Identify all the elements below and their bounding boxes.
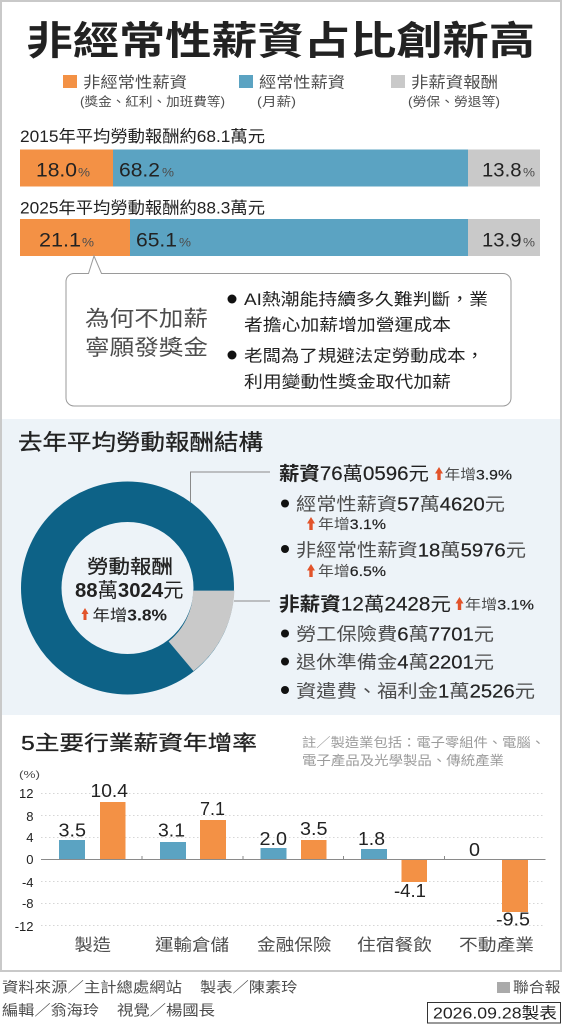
donut chart	[41, 502, 234, 674]
bar value labels: 1.8	[358, 828, 385, 849]
y axis labels: -12	[15, 919, 34, 934]
y axis labels: (%)	[19, 770, 40, 781]
wages total	[279, 463, 512, 485]
non-recurring wages	[281, 540, 526, 579]
footer credits: 視覺／楊國長	[117, 1002, 216, 1020]
chart note: 註／製造業包括：電子零組件、電腦、	[302, 735, 545, 750]
wages total: 薪資76萬0596元	[279, 463, 429, 485]
date stamp	[428, 1002, 560, 1023]
industry labels	[74, 936, 534, 954]
stacked bar 2025: 13.9	[482, 230, 522, 252]
callout question	[85, 307, 208, 360]
bar value labels: 3.5	[300, 818, 328, 839]
stacked bar 2025: %	[523, 236, 535, 250]
stacked bar 2025: %	[179, 236, 191, 250]
non-recurring wages: 非經常性薪資 18萬5976 元	[296, 540, 526, 560]
legend item: non-wage compensation: 非薪資報酬	[411, 74, 498, 92]
chart heading: 5主要行業薪資年增率	[21, 732, 257, 755]
leader line: wages	[190, 472, 270, 502]
date stamp: 2026.09.28製表	[433, 1004, 557, 1022]
labor insurance: 勞工保險費 6萬7701 元	[296, 624, 494, 644]
legend item: recurring pay: (月薪)	[257, 95, 296, 109]
orange bars: bonuses	[100, 802, 528, 912]
stacked bar 2015	[20, 150, 540, 186]
bar value labels: 10.4	[90, 780, 128, 801]
stacked bar 2025: 21.1	[39, 230, 81, 252]
industry labels: 運輸倉儲	[155, 936, 229, 954]
footer credits	[2, 980, 298, 1020]
callout: why bonuses instead of raises	[66, 256, 511, 406]
stacked bar 2015: 18.0	[36, 160, 77, 182]
industry labels: 住宿餐飲	[357, 936, 432, 954]
bar value labels: 2.0	[260, 828, 287, 849]
stacked bar 2015: %	[523, 166, 535, 180]
legend item: non-wage compensation	[391, 74, 500, 109]
bar value labels: 0	[469, 839, 480, 860]
legend item: non-wage compensation: (勞保、勞退等)	[408, 94, 500, 109]
bar chart: wage growth by industry	[15, 770, 546, 954]
bar value labels: -4.1	[394, 880, 426, 901]
legend item: recurring pay: 經常性薪資	[259, 74, 345, 92]
recurring wages: 經常性薪資 57萬4620 元	[296, 494, 505, 514]
callout reason 2	[228, 346, 484, 392]
title: 非經常性薪資占比創新高	[26, 20, 535, 64]
publisher mark: 聯合報	[513, 980, 561, 996]
non-wage total	[279, 594, 534, 616]
bar value labels: 7.1	[200, 798, 225, 819]
non-recurring wages: 年增 6.5%	[318, 563, 386, 579]
y axis labels: 4	[26, 830, 34, 845]
callout reason 1: AI熱潮能持續多久難判斷，業	[244, 290, 488, 309]
donut centre label: 88萬3024元	[75, 579, 183, 602]
legend	[63, 74, 500, 109]
legend item: non-recurring pay	[63, 74, 225, 109]
y axis labels: 8	[26, 809, 34, 824]
y axis labels: -8	[22, 896, 34, 911]
callout question: 為何不加薪	[85, 307, 208, 331]
blue bars: overall wages	[59, 840, 387, 860]
bar value labels	[58, 780, 530, 930]
callout reason 1: 者擔心加薪增加營運成本	[244, 316, 451, 334]
legend item: non-recurring pay: (獎金、紅利、加班費等)	[80, 94, 225, 109]
wages total: 年增 3.9%	[444, 466, 512, 482]
recurring wages: 年增 3.1%	[318, 516, 386, 532]
industry labels: 製造	[74, 936, 111, 954]
panel heading: 去年平均勞動報酬結構	[18, 430, 263, 455]
bar value labels: 3.5	[58, 820, 86, 840]
panel: compensation structure	[2, 419, 560, 715]
bar value labels: 3.1	[158, 820, 185, 840]
donut centre label: 勞動報酬	[87, 556, 173, 578]
donut centre label: 年增3.8%	[92, 606, 167, 624]
non-wage total: 非薪資 12萬2428元	[279, 594, 451, 616]
stacked bar 2025: 65.1	[136, 230, 177, 252]
y axis labels: 0	[26, 852, 34, 867]
footer credits: 製表／陳素玲	[200, 980, 298, 996]
footer credits: 資料來源／主計總處網站	[2, 980, 182, 996]
callout question: 寧願發獎金	[85, 336, 208, 360]
publisher mark	[497, 980, 561, 996]
industry labels: 金融保險	[257, 936, 332, 954]
recurring wages	[281, 494, 505, 532]
callout reason 1	[228, 290, 488, 334]
non-wage breakdown	[279, 594, 535, 702]
chart note: 電子產品及光學製品、傳統產業	[302, 753, 504, 768]
severance and benefits: 資遣費、福利金 1萬2526 元	[296, 682, 535, 702]
stacked bar 2015: %	[162, 166, 174, 180]
legend item: recurring pay	[239, 74, 345, 109]
stacked bar 2025: %	[82, 236, 94, 250]
non-wage total: 年增 3.1%	[465, 596, 534, 612]
leader line: non-wages	[234, 600, 270, 602]
stacked bar 2015: %	[78, 166, 90, 180]
donut centre label	[75, 556, 183, 624]
industry labels: 不動產業	[459, 936, 534, 954]
y axis labels	[15, 770, 40, 934]
callout reason 2: 老闆為了規避法定勞動成本，	[244, 346, 484, 366]
footer credits: 編輯／翁海玲	[2, 1002, 99, 1020]
stacked bar 2015: 13.8	[482, 160, 522, 182]
bar value labels: -9.5	[496, 908, 530, 930]
stacked bar 2025	[20, 219, 540, 256]
bar heading 2015: 2015年平均勞動報酬約68.1萬元	[20, 127, 265, 146]
wages breakdown	[279, 463, 526, 579]
chart note	[302, 735, 545, 768]
stacked bar 2015: 68.2	[119, 160, 160, 182]
y axis labels: 12	[19, 786, 34, 801]
pension reserve: 退休準備金 4萬2201 元	[296, 652, 494, 672]
legend item: non-recurring pay: 非經常性薪資	[83, 74, 187, 92]
callout reason 2: 利用變動性獎金取代加薪	[244, 372, 451, 392]
bar heading 2025: 2025年平均勞動報酬約88.3萬元	[20, 198, 265, 218]
y axis labels: -4	[22, 875, 34, 890]
